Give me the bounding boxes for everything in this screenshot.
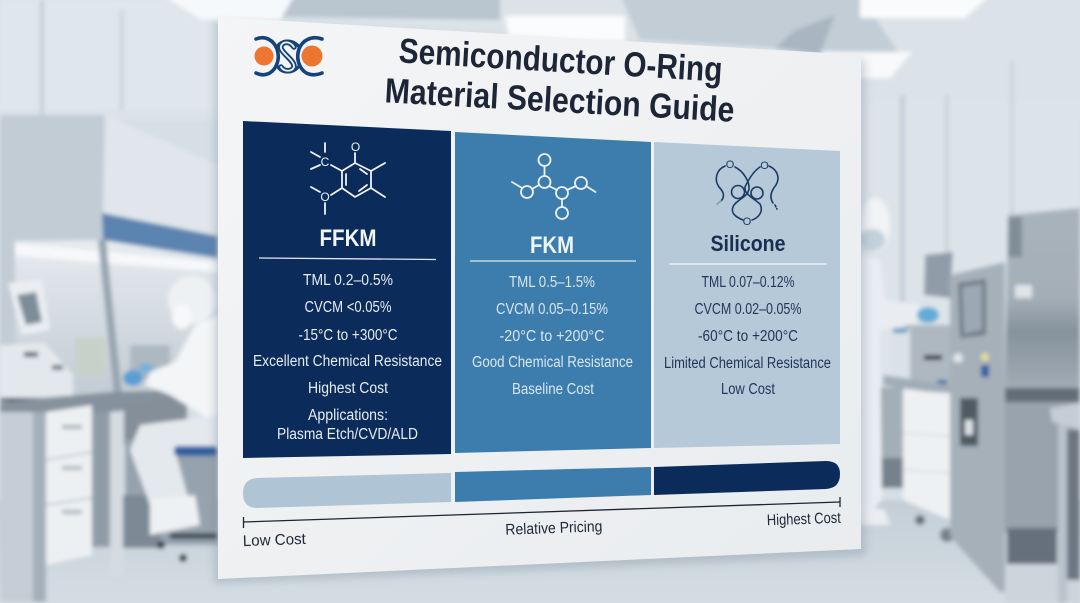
specs: FFKM: Highest Cost — [308, 380, 389, 397]
specs: FFKM: Applications: — [308, 407, 388, 424]
specs: FKM: TML 0.5–1.5% — [509, 274, 595, 291]
floor — [0, 500, 1080, 603]
specs: FFKM: CVCM <0.05% — [304, 299, 392, 316]
specs: FFKM: TML 0.2–0.5% — [303, 272, 393, 289]
axis: relative pricing: Relative Pricing — [505, 518, 603, 539]
right: center machine — [950, 262, 1012, 592]
label: FKM: FKM — [530, 232, 574, 259]
specs: Silicone — [664, 274, 831, 398]
right: drawers — [903, 390, 950, 520]
axis: relative pricing: Highest Cost — [767, 510, 842, 529]
specs: FKM: Baseline Cost — [512, 381, 595, 398]
specs: FFKM: -15°C to +300°C — [298, 327, 398, 344]
right wall — [860, 100, 1080, 420]
label: FFKM: FFKM — [320, 225, 376, 252]
icon: Silicone chain — [716, 159, 778, 228]
right: table — [1050, 403, 1080, 430]
label: Silicone: Silicone — [710, 231, 786, 256]
title: Semiconductor O-Ring — [398, 31, 724, 90]
left: fume hood — [0, 115, 105, 240]
specs: FKM — [472, 274, 633, 398]
specs: Silicone: Limited Chemical Resistance — [664, 355, 831, 372]
icon: FFKM molecule: O — [320, 190, 330, 204]
right: technician — [875, 387, 903, 483]
specs: Silicone: CVCM 0.02–0.05% — [694, 301, 802, 318]
panel: FKM — [455, 132, 651, 453]
specs: FKM: CVCM 0.05–0.15% — [496, 301, 608, 318]
axis: relative pricing: Low Cost — [243, 531, 307, 550]
right: large machine — [1005, 208, 1080, 390]
icon: Silicone chain: O — [760, 160, 769, 172]
left: technician — [125, 440, 218, 545]
panel: Silicone — [654, 142, 840, 448]
logo: DSC — [254, 38, 322, 75]
icon: FFKM molecule: O — [351, 140, 360, 154]
panel: guide board — [218, 17, 861, 579]
specs: FFKM: Plasma Etch/CVD/ALD — [277, 426, 418, 443]
icon: FFKM molecule — [311, 140, 385, 214]
title — [384, 31, 735, 130]
specs: FKM: Good Chemical Resistance — [472, 354, 633, 371]
title: Material Selection Guide — [384, 71, 735, 130]
specs: FKM: -20°C to +200°C — [500, 328, 604, 345]
icon: FFKM molecule: C — [321, 155, 330, 169]
specs: FFKM: Excellent Chemical Resistance — [253, 353, 442, 370]
left: instrument — [8, 280, 50, 335]
icon: Silicone chain: O — [743, 216, 752, 228]
left: bottles — [75, 338, 105, 376]
panel: FFKM — [243, 121, 451, 458]
ceiling — [0, 0, 1080, 120]
bar: relative pricing segments — [243, 461, 840, 508]
panel shadow — [214, 21, 866, 584]
specs: FFKM — [253, 272, 442, 443]
axis: relative pricing — [243, 497, 842, 550]
right: small instrument — [905, 325, 955, 387]
specs: Silicone: TML 0.07–0.12% — [702, 274, 795, 291]
left: bench and drawers — [0, 390, 185, 412]
right: monitor — [924, 252, 953, 298]
specs: Silicone: -60°C to +200°C — [698, 328, 798, 345]
icon: FKM molecule — [512, 154, 596, 219]
icon: Silicone chain: O — [726, 159, 735, 171]
specs: Silicone: Low Cost — [721, 381, 776, 398]
